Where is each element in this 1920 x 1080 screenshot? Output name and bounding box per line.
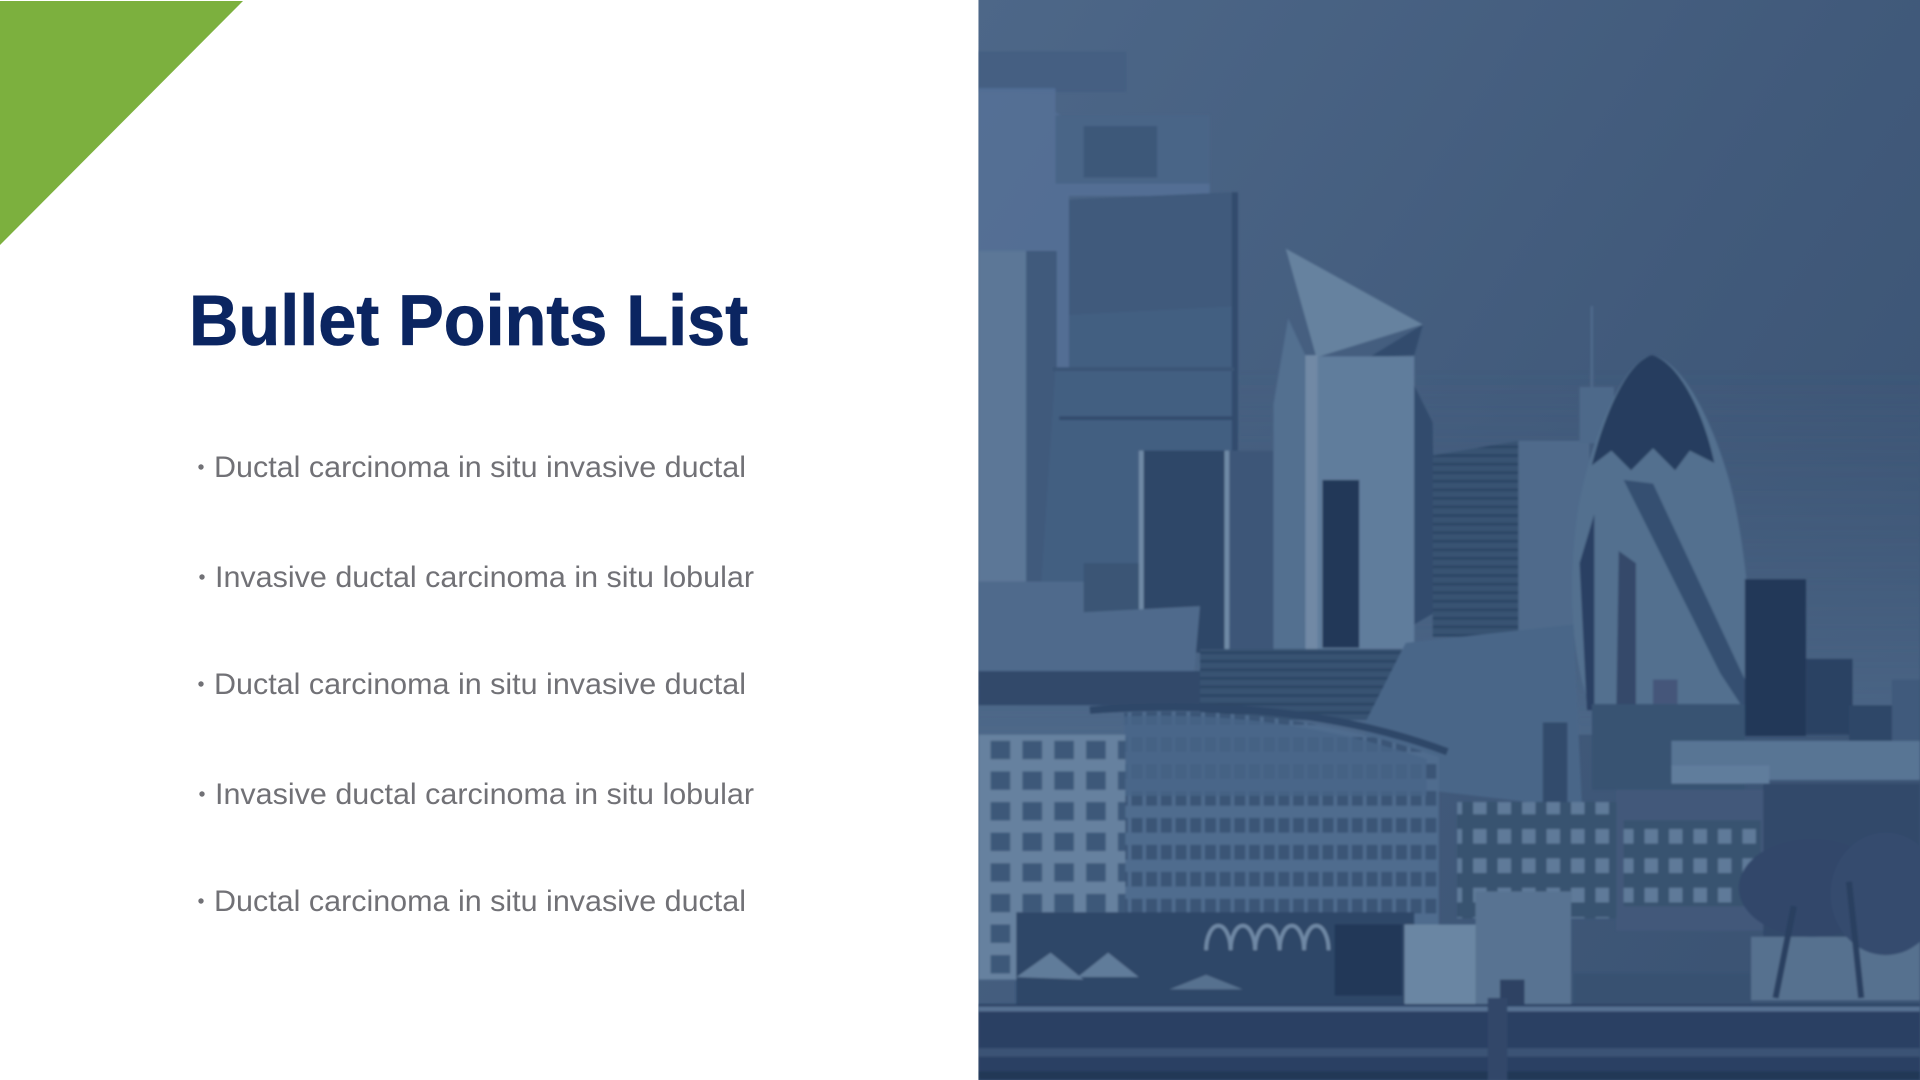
dark central blocks [1084, 451, 1288, 653]
mid-rise office blocks [1433, 306, 1614, 637]
white stone wall building [1404, 891, 1571, 1008]
pale curved tower, left [978, 51, 1210, 582]
background: white left panel [0, 0, 978, 1080]
apartment block, left [978, 735, 1125, 980]
spire and angular tower [1273, 249, 1435, 650]
low pale roofs, left [978, 582, 1402, 720]
historic stone buildings [1457, 784, 1920, 943]
skyline buildings [978, 51, 1920, 1080]
bullet item 4: Invasive ductal carcinoma in situ lobular [215, 778, 754, 811]
bullet list [198, 451, 754, 918]
tall glass tower [1056, 192, 1238, 577]
bullet item 2: Invasive ductal carcinoma in situ lobular [215, 561, 754, 594]
glass pyramid building [1365, 624, 1582, 808]
base of gherkin [1592, 704, 1746, 736]
bullet item 1: Ductal carcinoma in situ invasive ductal [214, 451, 746, 484]
trees on the right [1740, 852, 1920, 1001]
river embankment [978, 998, 1920, 1080]
sky [978, 0, 1920, 1080]
bullet item 5: Ductal carcinoma in situ invasive ductal [214, 885, 746, 918]
corner green triangle [0, 1, 243, 245]
bullet item 3: Ductal carcinoma in situ invasive ductal [214, 668, 746, 701]
curved glass building [1090, 707, 1447, 931]
pale low building, far right [1671, 741, 1920, 784]
brick houses and arches [1016, 912, 1414, 1007]
gherkin tower [1572, 355, 1753, 716]
dark towers right of gherkin [1745, 579, 1920, 742]
photo: city skyline with blue overlay [978, 0, 1920, 1080]
title: Bullet Points List [189, 282, 748, 361]
